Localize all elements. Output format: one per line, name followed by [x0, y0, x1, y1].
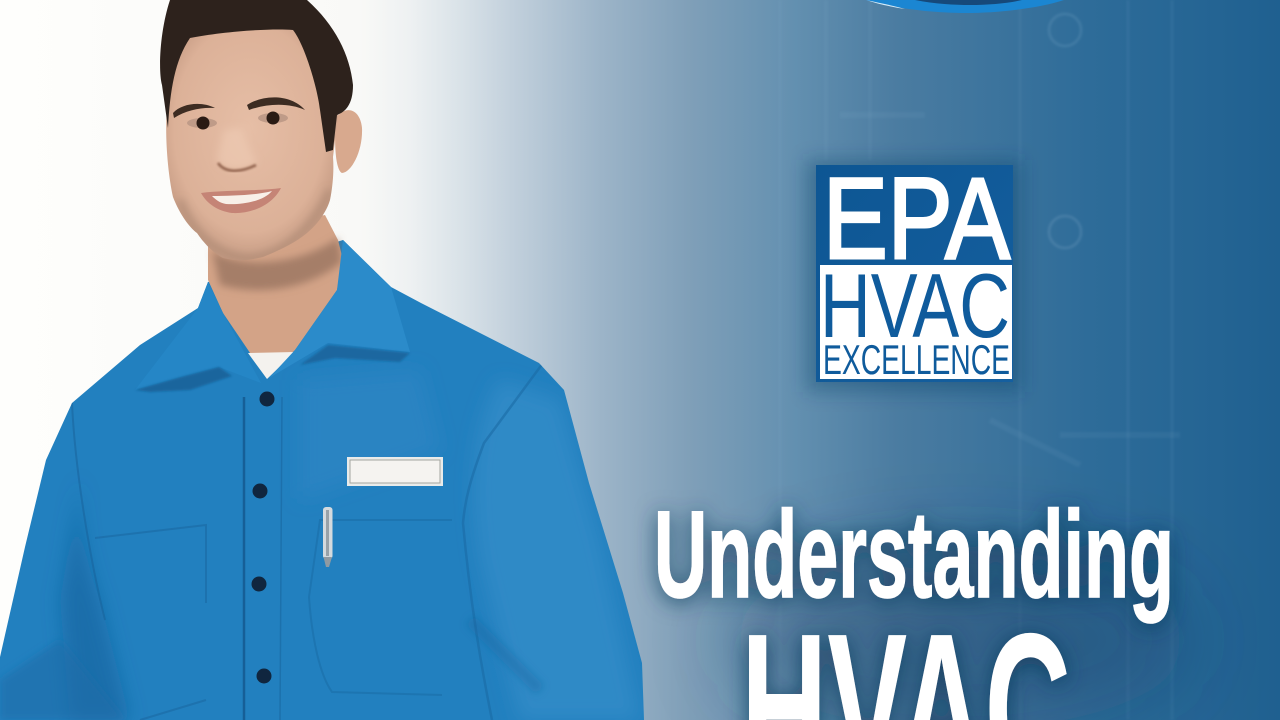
faint technical pattern — [780, 0, 1180, 720]
shirt buttons — [252, 392, 274, 684]
EPA HVAC Excellence logo — [806, 155, 1022, 392]
shirt body — [0, 240, 644, 720]
mouth — [201, 188, 281, 213]
undershirt — [248, 352, 295, 379]
title — [654, 487, 1174, 720]
technician figure — [0, 0, 644, 720]
name badge — [347, 457, 443, 486]
right eye — [258, 112, 288, 124]
face — [166, 20, 340, 260]
EXCELLENCE wordmark: EXCELLENCE — [823, 336, 1010, 383]
logo white panel — [820, 265, 1012, 379]
hair — [160, 0, 353, 152]
ear — [335, 110, 362, 173]
neck — [208, 215, 343, 378]
text shadow area — [730, 550, 1190, 720]
shirt folds and seams — [0, 363, 640, 720]
top logo arc — [866, 0, 1064, 13]
EPA wordmark: EPA — [823, 155, 1010, 283]
nose — [217, 128, 257, 169]
left eye — [187, 116, 217, 130]
right eyebrow — [247, 97, 305, 110]
left eyebrow — [173, 104, 215, 118]
pen — [323, 507, 332, 567]
right collar — [269, 240, 410, 378]
HVAC wordmark: HVAC — [820, 256, 1010, 357]
left collar — [135, 282, 261, 392]
jaw shadow — [180, 190, 330, 258]
logo shadow — [806, 160, 1022, 392]
logo blue panel — [816, 165, 1013, 382]
neck shadow — [212, 238, 342, 290]
